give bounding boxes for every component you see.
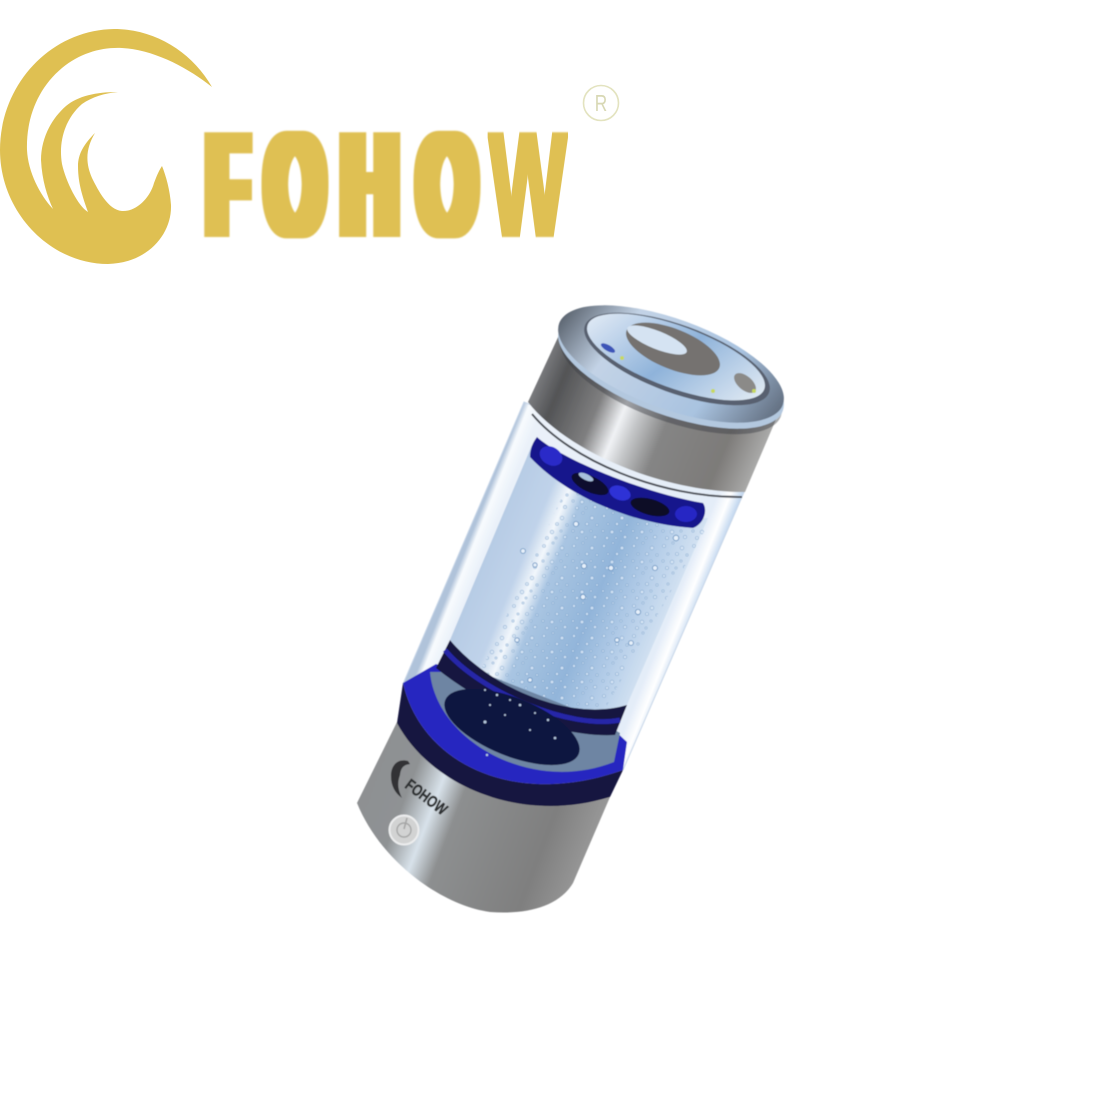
- cap rim edge: [544, 287, 798, 453]
- bowl speckles: [484, 689, 556, 756]
- cap lip shadow: [546, 294, 796, 458]
- registered mark: [584, 86, 618, 120]
- cap center dome: [619, 312, 727, 386]
- wordmark: FOHOW: [208, 103, 566, 266]
- cap grey reflection: [731, 369, 759, 397]
- wordmark: FOHOW: F: [208, 104, 247, 266]
- bottle cap side: [528, 333, 783, 492]
- wordmark: FOHOW: H: [342, 103, 397, 266]
- brand mark on base: FOHOW: [401, 776, 451, 820]
- blue glowing bowl: [403, 664, 627, 784]
- dark electrode oval: [434, 673, 590, 781]
- registered mark: R: [595, 92, 607, 117]
- cap blue sparkle: [600, 341, 616, 355]
- power button: [390, 816, 418, 844]
- logo: FOHOW brand: [0, 29, 618, 266]
- dark line under cap: [532, 414, 742, 497]
- wordmark: FOHOW: O: [418, 105, 476, 266]
- product: hydrogen water bottle: [357, 281, 798, 913]
- top blue electrode ring: [530, 437, 705, 528]
- dark seal band: [397, 683, 623, 806]
- dark chamber bottom: [436, 640, 627, 735]
- inner water chamber: [450, 445, 708, 711]
- wordmark: FOHOW: W: [490, 104, 566, 265]
- grey bowl inner: [430, 672, 620, 772]
- cap dark inner band: [573, 294, 781, 424]
- glass body: [403, 402, 745, 770]
- water bubbles: [482, 492, 704, 707]
- larger bubbles: [515, 506, 679, 682]
- metal base: [357, 722, 610, 913]
- cap green glints: [620, 356, 756, 393]
- icon: gold crescent swirl: [0, 29, 212, 264]
- dome reflection: [624, 320, 690, 360]
- brand mark on base: [391, 760, 451, 820]
- blue chamber lip: [445, 650, 620, 722]
- cap top ring: [544, 281, 798, 447]
- cap glass lens ring: [577, 296, 775, 418]
- wordmark: FOHOW: O: [266, 105, 324, 266]
